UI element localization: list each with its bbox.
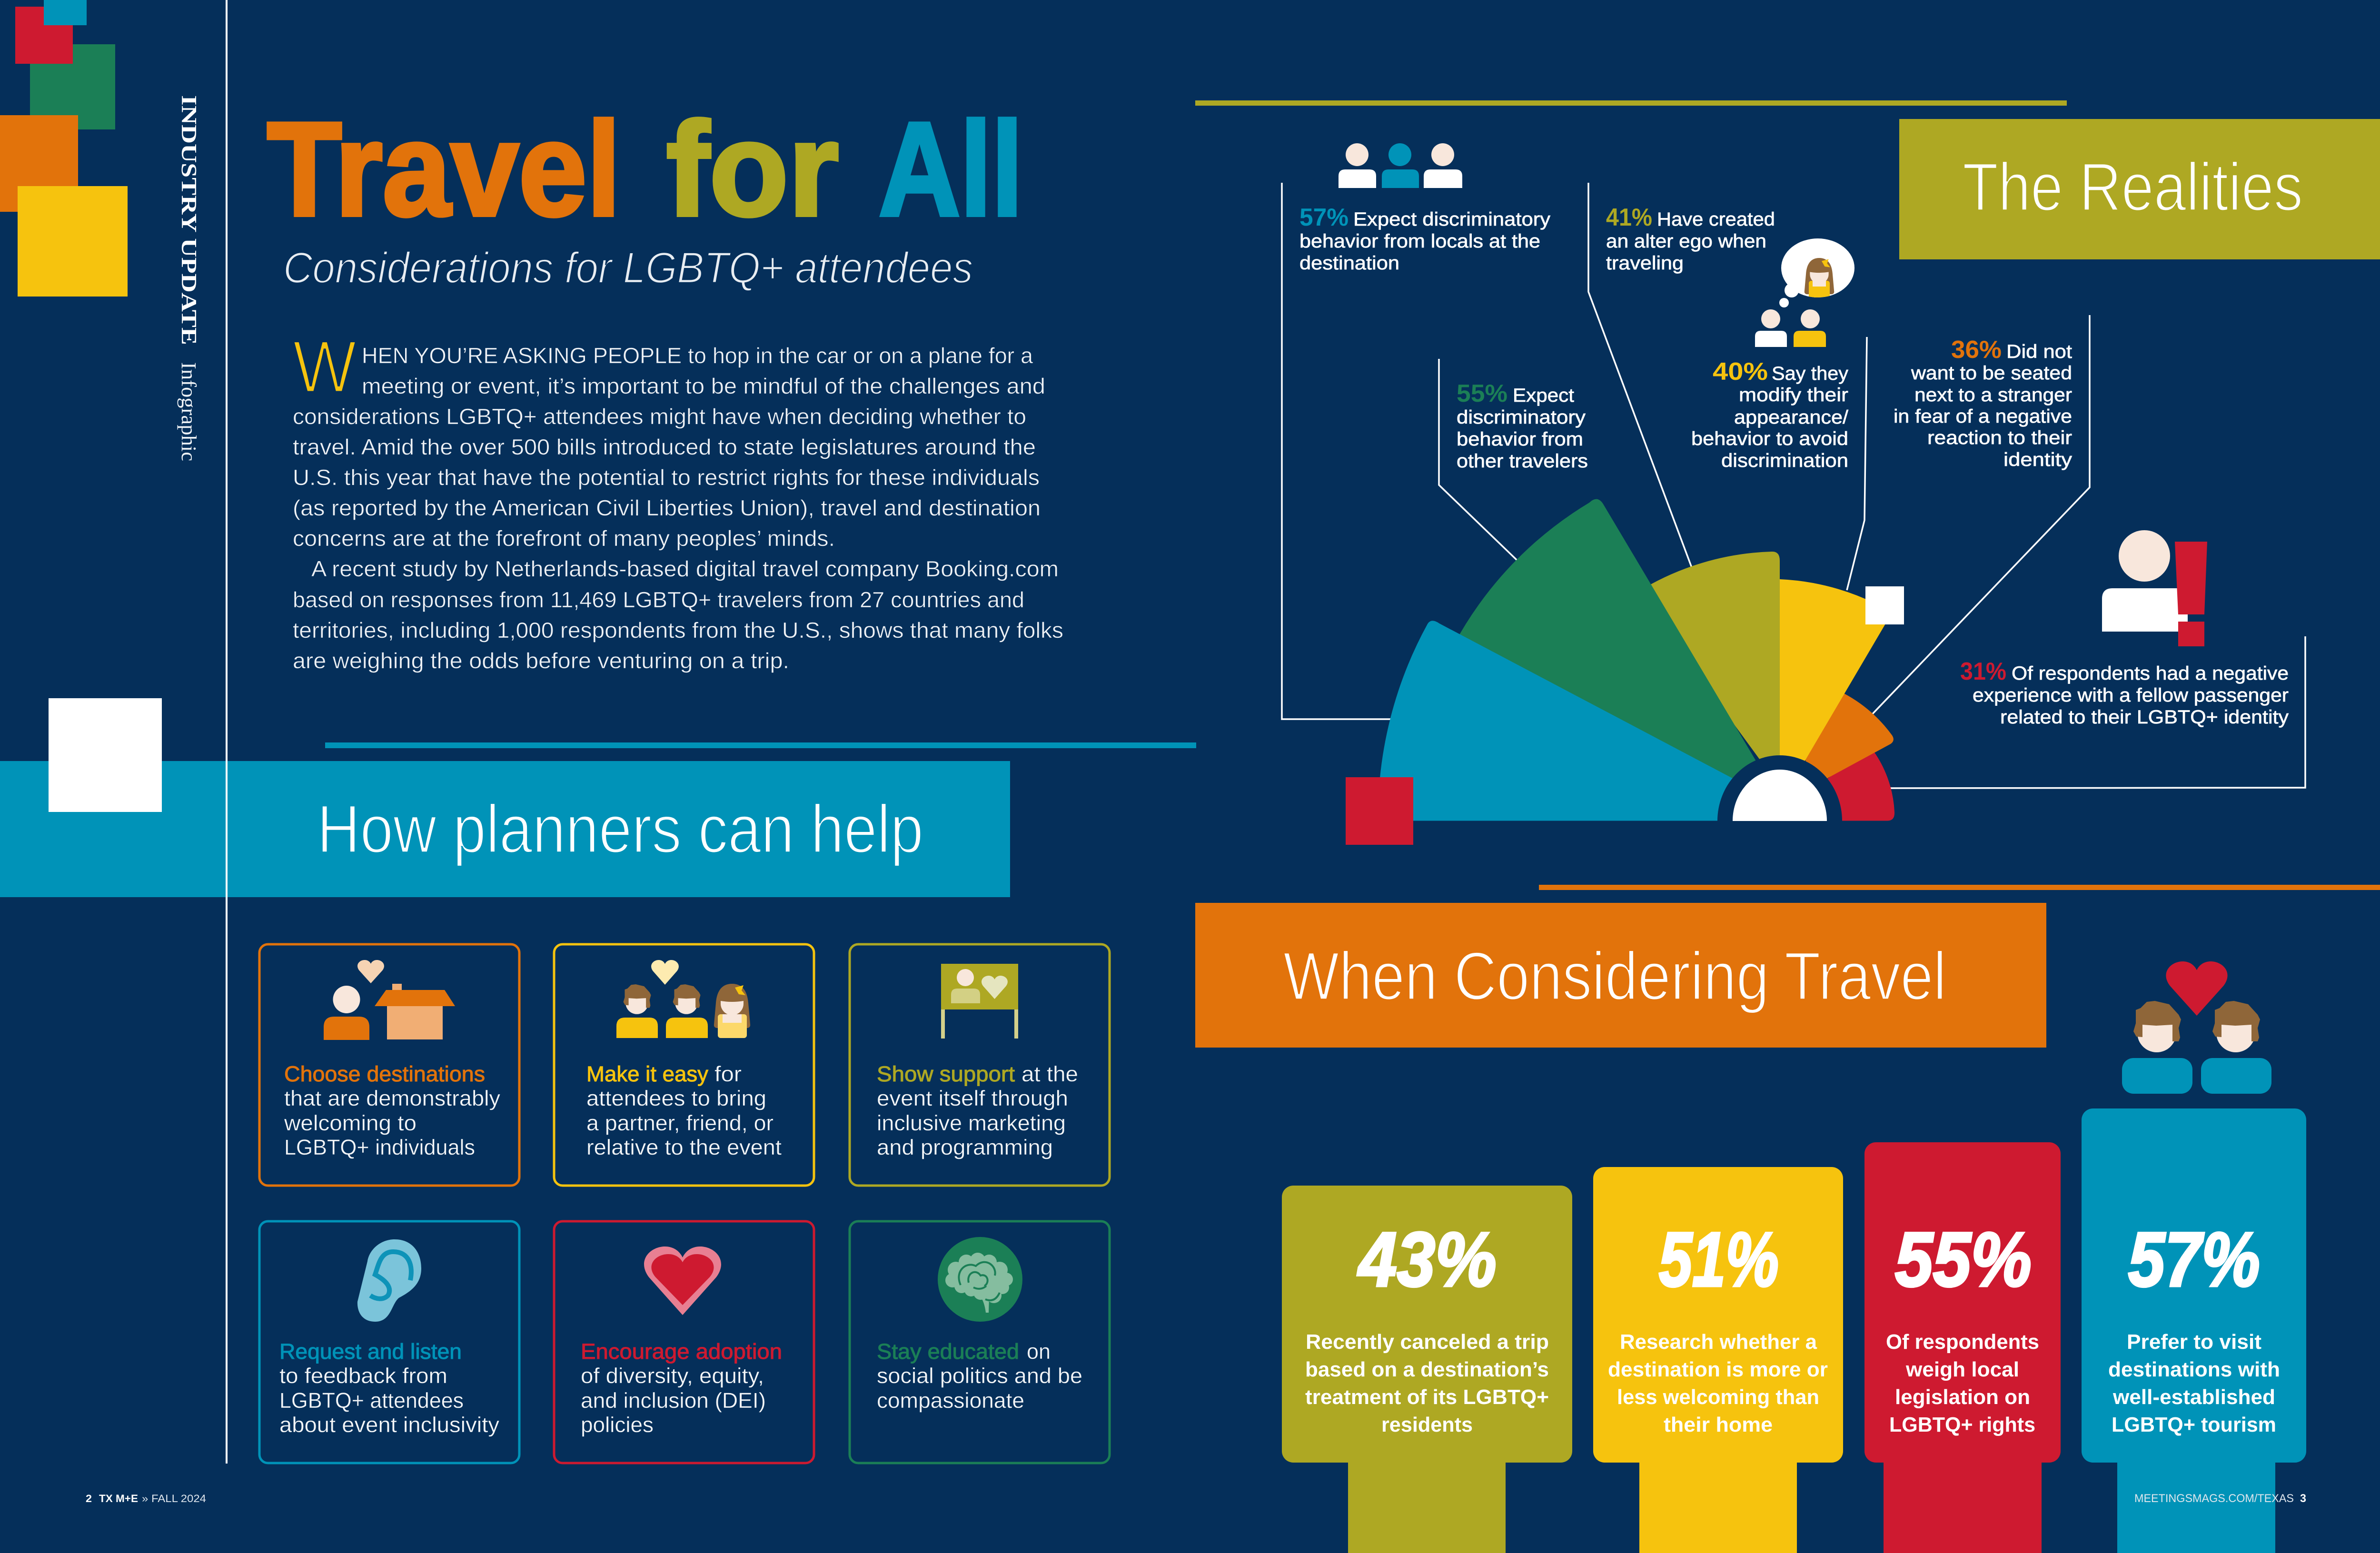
bar: 43%: 43%: [1357, 1217, 1497, 1303]
panel: request and listen: Request and listen: [279, 1339, 462, 1364]
bar: 43%: based on a destination’s: [1305, 1358, 1549, 1381]
intro text block: meeting or event, it’s important to be mindful of the challenges and: [362, 374, 1045, 398]
section banner: when considering travel: When Considering Travel: [1283, 939, 1946, 1014]
footer left: 2: [86, 1493, 92, 1504]
panel: request and listen: LGBTQ+ attendees: [279, 1388, 464, 1413]
icon: three people: [1339, 143, 1462, 188]
bar: 57%: Prefer to visit: [2127, 1330, 2261, 1354]
stat: 55%: Expect: [1513, 385, 1574, 406]
intro text block: HEN YOU’RE ASKING PEOPLE to hop in the car or on a plane for a: [362, 343, 1033, 368]
footer left: TX M+E: [99, 1493, 138, 1504]
panel: stay educated: [850, 1221, 1110, 1463]
section banner: when considering travel: [1195, 903, 2046, 1048]
stat: 36%: Did not: [2006, 341, 2072, 362]
panel: make it easy: a partner, friend, or: [586, 1111, 774, 1135]
panel: encourage adoption: Encourage adoption: [581, 1339, 782, 1364]
panel: encourage adoption: and inclusion (DEI): [581, 1388, 766, 1413]
side label: industry update infographic: [177, 95, 201, 461]
stat: 55%: behavior from: [1457, 429, 1583, 450]
panel: choose destinations: [259, 944, 519, 1186]
stat: 57%: destination: [1299, 253, 1399, 274]
panel: show support: event itself through: [877, 1086, 1068, 1110]
bar: 51%: less welcoming than: [1617, 1385, 1819, 1409]
bar: 43%: [1282, 1186, 1572, 1553]
bar: 57%: 57%: [2128, 1217, 2260, 1303]
stat: 41%: an alter ego when: [1606, 231, 1766, 252]
sector: olive 41%: [1637, 552, 1780, 762]
title: [267, 95, 1023, 244]
stat: 55%: 55%: [1457, 380, 1507, 407]
stat: 36%: reaction to their: [1927, 427, 2072, 448]
leader lines: [1282, 183, 2305, 788]
stat: 55%: [1457, 380, 1588, 472]
bar: 57%: LGBTQ+ tourism: [2112, 1413, 2276, 1436]
intro text block: A recent study by Netherlands-based digital travel company Booking.com: [311, 556, 1059, 581]
stat: 40%: [1691, 358, 1849, 471]
panel: stay educated: compassionate: [877, 1388, 1024, 1413]
panel: make it easy: [554, 944, 814, 1186]
stat: 55%: other travelers: [1457, 451, 1588, 472]
panel: choose destinations: welcoming to: [284, 1111, 416, 1135]
bar: 51%: Research whether a: [1620, 1330, 1817, 1354]
stat: 36%: identity: [2003, 449, 2072, 470]
stat: 31%: experience with a fellow passenger: [1973, 685, 2289, 706]
panel: show support: Show support: [877, 1062, 1015, 1086]
stat: 57%: Expect discriminatory: [1353, 209, 1550, 230]
stat: 36%: [1894, 336, 2072, 470]
bar: 55%: 55%: [1895, 1217, 2032, 1303]
intro text block: [293, 326, 1063, 673]
title: for: [666, 95, 839, 244]
footer left: [86, 1493, 206, 1504]
intro text block: U.S. this year that have the potential to restrict rights for these individuals: [293, 465, 1040, 490]
stat: 40%: discrimination: [1721, 450, 1848, 471]
icon: sign: [941, 964, 1018, 1039]
icon: ear: [357, 1239, 421, 1322]
stat: 31%: Of respondents had a negative: [2012, 663, 2289, 684]
panel: encourage adoption: of diversity, equity,: [581, 1364, 764, 1388]
bar: 55%: weigh local: [1905, 1358, 2019, 1381]
icon: thought bubble with two people: [1755, 238, 1854, 347]
panel: stay educated: Stay educated: [877, 1339, 1019, 1364]
icon: heart: [644, 1246, 721, 1315]
intro text block: (as reported by the American Civil Liberties Union), travel and destination: [293, 495, 1041, 520]
vertical rule: [226, 0, 228, 1464]
bar: 55%: legislation on: [1895, 1385, 2030, 1409]
stat: 40%: appearance/: [1734, 407, 1849, 428]
intro text block: concerns are at the forefront of many peoples’ minds.: [293, 526, 835, 551]
bar: 43%: residents: [1381, 1413, 1473, 1436]
intro text block: based on responses from 11,469 LGBTQ+ travelers from 27 countries and: [293, 587, 1024, 612]
sector: red 31%: [1809, 747, 1894, 821]
footer right: 3: [2300, 1492, 2306, 1505]
footer left: » FALL 2024: [142, 1493, 206, 1504]
stat: 55%: discriminatory: [1457, 407, 1586, 428]
intro text block: considerations LGBTQ+ attendees might have when deciding whether to: [293, 404, 1026, 429]
bar: 51%: 51%: [1659, 1217, 1779, 1303]
sector: green 55%: [1428, 499, 1766, 794]
stat: 40%: modify their: [1739, 385, 1848, 406]
bar: 55%: LGBTQ+ rights: [1889, 1413, 2035, 1436]
stat: 41%: traveling: [1606, 253, 1684, 274]
bar: 51%: their home: [1664, 1413, 1773, 1436]
section banner: how planners can help: How planners can help: [317, 791, 923, 867]
sector: yellow 40%: [1780, 579, 1892, 762]
square accents: [1346, 777, 1413, 845]
icon: person and house: [324, 960, 455, 1040]
stat: 31%: [1960, 658, 2289, 728]
panel: choose destinations: that are demonstrably: [284, 1086, 501, 1110]
panel: choose destinations: Choose destinations: [284, 1062, 485, 1086]
icon: person with exclamation mark: [2102, 530, 2207, 646]
intro text block: territories, including 1,000 respondents from the U.S., shows that many folks: [293, 618, 1063, 643]
panel: show support: [850, 944, 1110, 1186]
section banner: the realities: [1899, 119, 2380, 259]
panel: request and listen: to feedback from: [279, 1364, 447, 1388]
panel: make it easy: relative to the event: [586, 1135, 782, 1159]
bar: 57%: [2082, 1108, 2306, 1553]
stat: 57%: 57%: [1299, 204, 1349, 231]
stat: 36%: want to be seated: [1911, 363, 2072, 384]
stat: 40%: 40%: [1713, 358, 1768, 386]
side label: industry update infographic: INDUSTRY UPDATE: [177, 95, 201, 345]
title: All: [879, 95, 1023, 244]
bar: 55%: Of respondents: [1886, 1330, 2039, 1354]
stat: 41%: [1606, 204, 1775, 274]
panel: make it easy: Make it easy: [586, 1062, 708, 1086]
icon: brain: [938, 1237, 1022, 1322]
bar: 57%: destinations with: [2108, 1358, 2280, 1381]
panel: encourage adoption: [554, 1221, 814, 1463]
intro text block: travel. Amid the over 500 bills introduced to state legislatures around the: [293, 435, 1036, 459]
bar: 57%: well-established: [2112, 1385, 2275, 1409]
intro text block: are weighing the odds before venturing on a trip.: [293, 648, 789, 673]
divider: realities rule: [1195, 100, 2067, 106]
icon: three people: [616, 960, 750, 1038]
chart hub: [1717, 755, 1842, 821]
subtitle: Considerations for LGBTQ+ attendees: [283, 244, 973, 292]
stat: 36%: next to a stranger: [1914, 385, 2072, 406]
stat: 31%: related to their LGBTQ+ identity: [2000, 707, 2289, 728]
panel: make it easy: attendees to bring: [586, 1086, 766, 1110]
stat: 36%: in fear of a negative: [1894, 406, 2072, 427]
side label: industry update infographic: Infographic: [177, 362, 200, 461]
sector: orange 36%: [1805, 693, 1894, 790]
decorative colour squares: [0, 0, 128, 297]
section banner: the realities: The Realities: [1963, 149, 2303, 225]
stat: 57%: [1299, 204, 1550, 274]
bar: 51%: [1593, 1167, 1843, 1553]
bar: 43%: treatment of its LGBTQ+: [1305, 1385, 1549, 1409]
panel: request and listen: about event inclusivity: [279, 1413, 500, 1437]
panel: encourage adoption: policies: [581, 1413, 654, 1437]
fan chart: [1346, 499, 1904, 845]
panel: stay educated: social politics and be: [877, 1364, 1082, 1388]
stat: 41%: Have created: [1657, 209, 1775, 230]
panel: show support: at the: [1021, 1062, 1078, 1086]
drop cap: W: [293, 326, 357, 408]
stat: 40%: behavior to avoid: [1691, 428, 1848, 449]
footer right: MEETINGSMAGS.COM/TEXAS: [2134, 1492, 2294, 1505]
stat: 40%: Say they: [1772, 363, 1848, 384]
stat: 57%: behavior from locals at the: [1299, 231, 1540, 252]
panel: show support: and programming: [877, 1135, 1053, 1159]
bar: 51%: destination is more or: [1608, 1358, 1828, 1381]
panel: choose destinations: LGBTQ+ individuals: [284, 1135, 475, 1159]
sector: blue 57%: [1378, 621, 1761, 821]
section banner: how planners can help: [0, 698, 1196, 897]
panel: show support: inclusive marketing: [877, 1111, 1066, 1135]
icon: couple with heart: [2122, 961, 2271, 1094]
panel: stay educated: on: [1027, 1339, 1051, 1364]
stat: 36%: 36%: [1951, 336, 2002, 364]
bar: 43%: Recently canceled a trip: [1306, 1330, 1549, 1354]
divider: considering travel rule: [1539, 885, 2380, 890]
title: Travel: [267, 95, 621, 244]
bar: 55%: [1864, 1142, 2061, 1553]
panel: request and listen: [259, 1221, 519, 1463]
panel: make it easy: for: [714, 1062, 742, 1086]
stat: 31%: 31%: [1960, 658, 2006, 685]
stat: 41%: 41%: [1606, 204, 1652, 231]
